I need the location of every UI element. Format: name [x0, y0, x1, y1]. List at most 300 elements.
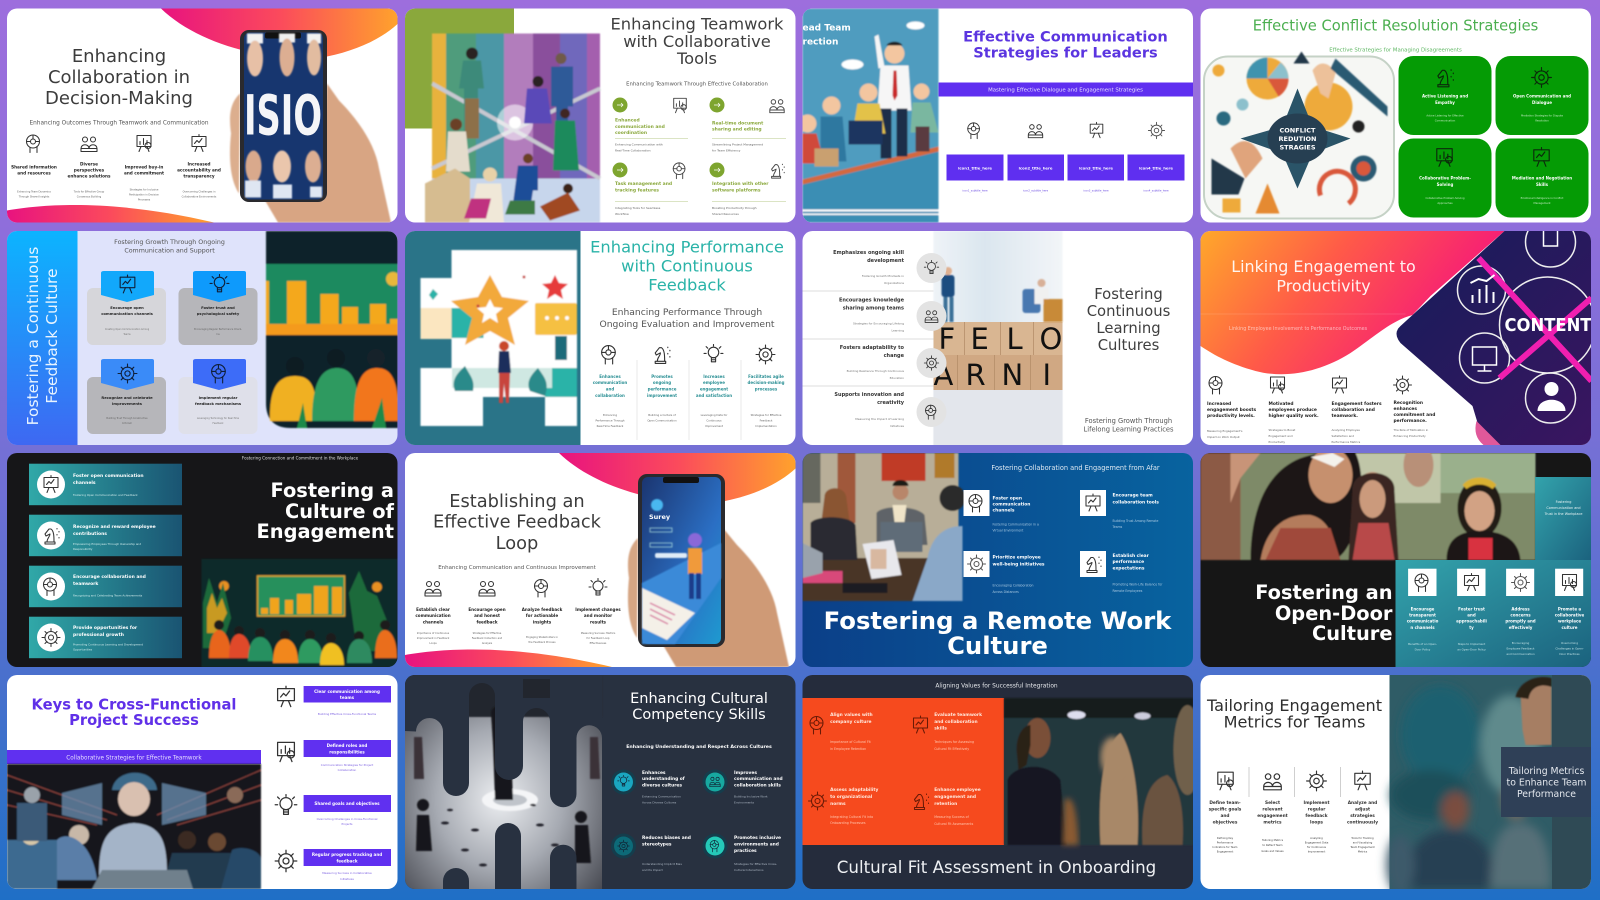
slate cutout bars	[405, 675, 602, 889]
item: select relevant metrics: engagement	[1257, 813, 1288, 819]
item: motivated employees: employees produce	[1268, 407, 1317, 413]
card: implement regular feedback	[178, 359, 258, 434]
item: implement regular feedback loops: feedback	[1305, 813, 1328, 819]
item: evaluate teamwork: Cultural Fit Effectively	[934, 747, 969, 751]
item: prioritize well-being	[964, 551, 1045, 594]
item: enhances communication: and	[606, 386, 614, 392]
illustration: conflict compass	[1204, 52, 1394, 218]
item: foster trust and approachability: Foster trust	[1458, 606, 1485, 612]
item: improves communication: Environments	[734, 800, 754, 804]
item: enhance employee engagement	[914, 787, 981, 826]
card: open communication: Resolution	[1535, 118, 1549, 122]
subtitle: Enhancing Understanding and Respect Across Cultures	[626, 744, 772, 750]
photo: man viewing sculptures	[1004, 698, 1202, 845]
item: increases employee engagement: engagement	[700, 386, 728, 392]
item: regular progress tracking: Measuring Success in Collaborative	[322, 871, 372, 875]
compass label: STRAGIES	[1279, 144, 1316, 152]
item: motivated employees: Engagement and	[1268, 434, 1293, 438]
item: recognition enhances commitment: The Role of Motivation in	[1392, 428, 1428, 432]
item: increases employee engagement: employee	[703, 380, 725, 385]
item: implement regular feedback loops: Analyzing	[1310, 836, 1323, 840]
item: implement changes: Effectiveness	[590, 641, 607, 645]
item: evaluate teamwork: skills	[934, 726, 947, 732]
item: prioritize well-being: Across Distances	[992, 590, 1019, 594]
item: encourage transparent communication: communicatio	[1407, 618, 1439, 624]
panel: Tailoring Engagement Metrics for Teams	[1200, 675, 1591, 895]
diagram word: CONTENT	[1504, 315, 1592, 336]
box caption: Communication and	[1546, 506, 1581, 510]
item: enhances understanding: Enhancing Communication	[642, 794, 681, 798]
item: define team-specific goals: Indicators for Team	[1213, 845, 1238, 849]
item: recognition enhances commitment	[1392, 376, 1435, 438]
panel: Effective Communication Strategies for Leaders	[798, 8, 1194, 222]
item: supports innovation: Supports innovation and	[834, 392, 904, 398]
item: select relevant metrics	[1257, 774, 1288, 853]
item: clear communication: teams	[340, 695, 355, 700]
item: icon 2: icon2_title_here	[1019, 166, 1053, 170]
item: foster open communication: communication	[992, 502, 1030, 508]
item: encourage transparent communication: n channels	[1410, 625, 1435, 630]
item: establish clear channels: Establish clear	[416, 607, 450, 612]
card: implement regular feedback: Leveraging Technology for Real-Time	[197, 417, 240, 420]
item: select relevant metrics: relevant	[1262, 806, 1283, 812]
item: icon 1	[946, 123, 1004, 192]
teal panel	[1396, 560, 1592, 667]
item: enhances understanding: Enhances	[642, 770, 666, 776]
title: Enhancing Cultural	[630, 691, 768, 707]
item: recognition enhances commitment: performance.	[1394, 418, 1427, 424]
item: facilitates agile decision-making: Implementation	[755, 424, 777, 428]
item: improves communication	[702, 770, 783, 804]
item: establish clear channels: Importance of Continuous	[417, 631, 450, 635]
item: icon 2: icon2_subtitle_here	[1023, 188, 1048, 192]
phone: survey app	[638, 474, 725, 647]
item: enhanced communication	[612, 98, 688, 152]
item: analyze and adjust strategies	[1347, 771, 1378, 854]
title: Loop	[496, 533, 538, 554]
blurred photo: business people	[1386, 675, 1552, 895]
panel: Effective Conflict Resolution Strategies	[1200, 8, 1591, 222]
card: recognize and celebrate: Building Trust Through Constructive	[106, 417, 148, 420]
item: engagement fosters collaboration: Analyzing Employee	[1332, 428, 1360, 432]
panel: Fostering an Open-Door Culture	[1200, 443, 1592, 667]
item: implement changes: and monitor	[584, 613, 612, 618]
item: promote collaborative workplace: Promote a	[1558, 606, 1581, 612]
item: enhances communication: communication	[593, 380, 627, 385]
phone word: ISIO	[244, 84, 322, 148]
purple band	[7, 750, 261, 764]
heading: Communication and Support	[124, 248, 215, 254]
card: encourage collaboration: Recognizing and Celebrating Team Achievements	[73, 594, 143, 598]
item: defined roles: Communication Strategies for Project	[321, 763, 374, 767]
card: recognize and celebrate: improvements	[112, 402, 143, 406]
compass label: CONFLICT	[1280, 126, 1316, 134]
item: address concerns: Address	[1511, 606, 1530, 612]
card: active listening: Active Listening and	[1422, 94, 1468, 98]
item: regular progress tracking: Regular progress tracking and	[312, 852, 382, 857]
bottom swoosh	[7, 205, 214, 222]
item: real-time document sharing: for Team Efficiency	[712, 148, 741, 152]
item: promotes ongoing performance: ongoing	[653, 380, 671, 385]
item: establish clear performance expectations: Remote Employees	[1112, 589, 1143, 593]
title: Establishing an	[449, 491, 585, 512]
item: engagement fosters collaboration: Satisfaction and	[1332, 434, 1354, 438]
item: diverse perspectives: Tools for Effective Group	[74, 190, 105, 194]
item: promotes ongoing performance	[647, 347, 677, 422]
item: promotes inclusive environments: Cultural Interactions	[734, 868, 764, 872]
item: engagement fosters collaboration	[1332, 376, 1382, 444]
item: engagement fosters collaboration: collaboration and	[1332, 407, 1375, 413]
item: foster open communication	[964, 490, 1039, 532]
item: enhances understanding	[611, 770, 685, 804]
item: encourages knowledge sharing: Encourages knowledge	[839, 298, 905, 304]
card: active listening: Empathy	[1435, 100, 1455, 105]
title: Project Success	[69, 712, 199, 729]
item: promotes ongoing performance: performance	[648, 386, 677, 392]
item: define team-specific goals: specific goals	[1209, 806, 1242, 812]
item: promotes ongoing performance: Promotes	[651, 374, 673, 379]
item: facilitates agile decision-making: processes	[755, 386, 778, 392]
illustration: star and team	[420, 250, 577, 426]
photo: family around table	[1200, 443, 1536, 560]
item: promotes ongoing performance: improvement	[647, 393, 677, 398]
item: enhanced communication: Enhancing Communication with	[615, 142, 663, 146]
item: increases employee engagement: Leveraging Data for	[701, 413, 728, 417]
item: implement regular feedback loops: Implement	[1303, 800, 1330, 806]
card: recognize and celebrate	[87, 359, 166, 434]
item: establish clear channels: channels	[423, 620, 444, 624]
item: select relevant metrics: Goals and Values	[1261, 849, 1284, 853]
item: assess adaptability	[808, 787, 878, 825]
subtitle: Enhancing Performance Through	[612, 307, 762, 318]
item: encourage team collaboration tools	[1080, 490, 1159, 529]
item: integration with other platforms	[710, 162, 786, 216]
purple band: Collaborative Strategies for Effective Teamwork	[66, 756, 202, 762]
item: enhanced communication: communication and	[615, 124, 665, 130]
purple band: Mastering Effective Dialogue and Engagement Strategies	[988, 88, 1143, 94]
title: Productivity	[1276, 276, 1371, 296]
item: analyze and adjust strategies: and Visualizing	[1353, 840, 1373, 844]
item: analyze and adjust strategies: strategies	[1350, 813, 1375, 819]
item: emphasizes ongoing skill development	[833, 250, 946, 285]
card: collaborative problem-solving	[1398, 138, 1492, 218]
item: promote collaborative workplace: collaborative	[1555, 612, 1585, 618]
title: Strategies for Leaders	[973, 44, 1158, 62]
item: foster trust and approachability: ty	[1469, 625, 1474, 630]
title: Metrics for Teams	[1224, 712, 1365, 732]
title: Fostering a Remote Work	[824, 606, 1172, 635]
item: analyze and adjust strategies: Analyze and	[1348, 800, 1377, 806]
card: provide opportunities: Promoting Continuous Learning and Development	[73, 642, 144, 646]
item: enhanced communication: Real-Time Collaboration	[615, 148, 651, 152]
item: establish clear channels: communication	[415, 613, 451, 618]
card: foster open communication: channels	[73, 480, 96, 486]
card: mediation and negotiation: Emotional Intelligence in Conflict	[1521, 196, 1563, 200]
item: improved buy-in: Processes	[138, 198, 151, 202]
item: implement regular feedback loops	[1303, 771, 1330, 854]
item: clear communication: Building Effective Cross-Functional Teams	[318, 712, 377, 716]
item: address concerns: and Communication	[1506, 652, 1535, 656]
item: engagement fosters collaboration: Performance Metrics	[1332, 440, 1361, 444]
item: define team-specific goals: Define team-	[1209, 800, 1241, 806]
panel: Fostering a Continuous Feedback Culture	[7, 231, 400, 445]
subtitle: Enhancing Outcomes Through Teamwork and Communication	[29, 120, 209, 126]
item: encourage team collaboration tools: Encourage team	[1112, 492, 1153, 498]
photo: wooden letter blocks	[934, 231, 1062, 445]
item: task management: Task management and	[615, 181, 672, 187]
item: regular progress tracking	[275, 849, 391, 881]
item: encourages knowledge sharing: Learning	[891, 328, 904, 332]
overlay caption box: Performance	[1517, 789, 1576, 800]
title: with Collaborative	[623, 32, 771, 51]
item: promotes inclusive environments: environments and	[734, 842, 779, 848]
item: address concerns: Encouraging	[1512, 641, 1529, 645]
item: foster trust and approachability: Steps to Implement	[1458, 642, 1486, 646]
item: shared information: Through Shared Insights	[19, 194, 50, 198]
title: Enhancing Teamwork	[611, 14, 784, 34]
photo: futuristic team	[7, 764, 261, 889]
item: reduces biases	[611, 834, 691, 872]
top subtitle: Fostering Connection and Commitment in the Workplace	[242, 456, 359, 460]
card: active listening	[1398, 56, 1492, 135]
item: prioritize well-being: Encouraging Collaboration	[992, 584, 1034, 588]
card: foster open communication: Fostering Open Communication and Feedback	[73, 493, 138, 497]
item: increased engagement: engagement boosts	[1207, 407, 1257, 413]
item: icon 4	[1128, 122, 1184, 192]
item: enhance employee engagement: retention	[934, 801, 957, 807]
blue side bar	[7, 231, 78, 445]
rotated title: Fostering a Continuous	[24, 247, 42, 425]
title: Tools	[676, 49, 717, 68]
panel: Cultural Fit Assessment in Onboarding	[802, 675, 1202, 889]
item: enhance employee engagement: Measuring Success of	[934, 815, 970, 819]
item: icon 4: icon4_subtitle_here	[1143, 188, 1169, 192]
survey label: Surey	[649, 513, 671, 521]
item: clear communication	[278, 686, 391, 716]
subtitle: Linking Employee Involvement to Performance Outcomes	[1229, 326, 1368, 332]
title: Engagement	[257, 520, 394, 543]
item: foster trust and approachability: and	[1467, 612, 1476, 618]
card: implement regular feedback: Feedback	[213, 422, 224, 425]
title: Culture	[947, 631, 1048, 660]
item: promote collaborative workplace	[1555, 569, 1585, 656]
item: clear communication: Clear communication among	[314, 689, 380, 694]
subtitle: Enhancing Communication and Continuous Improvement	[438, 565, 597, 571]
card: foster trust: psychological safety	[197, 312, 240, 316]
card: encourage collaboration	[29, 566, 182, 607]
item: establish clear channels	[415, 582, 451, 645]
item: analyze feedback	[522, 580, 563, 644]
item: foster trust and approachability: an Open-Door Policy	[1457, 648, 1486, 652]
item: implement changes: for Feedback Loop	[587, 636, 610, 640]
item: reduces biases: Reduces biases and	[642, 835, 691, 841]
item: select relevant metrics: to Reflect Team	[1262, 843, 1283, 847]
item: address concerns	[1505, 569, 1536, 656]
panel: Fostering Continuous Learning Cultures	[802, 231, 1193, 445]
photo: office meeting	[802, 453, 966, 601]
item: encourage open feedback: Feedback Collection and	[472, 636, 503, 640]
card: foster trust: Encouraging Regular Performance Check-	[194, 328, 242, 331]
item: foster open communication: Virtual Environment	[992, 528, 1024, 532]
item: promote collaborative workplace: Challenges in Open-	[1555, 646, 1584, 650]
card: open communication	[1496, 56, 1588, 135]
item: enhances communication: collaboration	[595, 393, 625, 398]
title: Collaboration in	[48, 67, 190, 88]
item: motivated employees: higher quality work.	[1268, 413, 1319, 419]
item: encourage open feedback	[468, 582, 506, 645]
item: encourage team collaboration tools: Teams	[1112, 525, 1123, 529]
item: assess adaptability: norms	[830, 801, 846, 807]
item: integration with other platforms: Shared Resources	[712, 212, 739, 216]
item: define team-specific goals: Engagement	[1217, 850, 1233, 854]
item: facilitates agile decision-making: Feedback	[760, 418, 773, 422]
item: shared goals: Projects	[341, 822, 353, 826]
overlay caption box: Tailoring Metrics	[1508, 766, 1584, 777]
title: Decision-Making	[45, 88, 193, 109]
orange panel	[802, 698, 1004, 845]
panel: Establishing an Effective Feedback Loop	[405, 453, 796, 667]
item: shared information: Enhancing Team Dynamics	[17, 190, 52, 194]
item: motivated employees: Motivated	[1268, 401, 1294, 407]
card: provide opportunities: Provide opportunities for	[73, 625, 138, 631]
title: Feedback	[648, 276, 726, 294]
item: select relevant metrics: Select	[1265, 800, 1280, 806]
card: mediation and negotiation	[1496, 138, 1588, 218]
item: recognition enhances commitment: enhances	[1394, 406, 1417, 412]
item: increases employee engagement: Continuous	[706, 418, 722, 422]
item: align values	[810, 712, 873, 751]
item: enhance employee engagement: engagement and	[934, 794, 976, 800]
item: improved buy-in: Improved buy-in	[125, 164, 163, 170]
item: analyze and adjust strategies: Team Engagement	[1350, 845, 1375, 849]
item: encourage open feedback: and honest	[474, 613, 500, 618]
item: fosters adaptability: Fosters adaptability to	[840, 345, 905, 351]
item: analyze and adjust strategies: adjust	[1355, 806, 1370, 812]
item: establish clear performance expectations: Promoting Work-Life Balance for	[1112, 582, 1163, 586]
item: reduces biases: and Its Impact	[642, 868, 664, 872]
illustration: team and chart in jungle	[202, 559, 398, 667]
card: recognize and reward	[29, 515, 182, 556]
item: real-time document sharing	[710, 98, 786, 152]
item: establish clear performance expectations: expectations	[1112, 566, 1145, 572]
item: address concerns: promptly and	[1505, 618, 1536, 624]
item: emphasizes ongoing skill development: Organizations	[884, 281, 904, 285]
item: engagement fosters collaboration: Engagement fosters	[1332, 401, 1382, 407]
item: supports innovation	[834, 392, 946, 428]
item: implement changes: Measuring Success: Metrics	[581, 631, 616, 635]
title: Fostering an	[1255, 581, 1392, 604]
item: improves communication: Improves	[734, 770, 757, 776]
item: enhances understanding: Across Diverse Cultures	[642, 800, 677, 804]
item: establish clear channels: Improvement in Feedback	[417, 636, 450, 640]
item: increased accountability: accountability and	[177, 168, 221, 172]
item: encourages knowledge sharing: sharing among teams	[843, 306, 904, 312]
item: foster trust and approachability	[1456, 569, 1487, 652]
card: foster trust: Foster trust and	[201, 306, 235, 310]
item: engagement fosters collaboration: teamwork.	[1332, 413, 1358, 419]
item: reduces biases: Understanding Implicit Bias	[642, 862, 682, 866]
item: align values: company culture	[830, 719, 872, 725]
item: promote collaborative workplace: culture	[1561, 625, 1578, 630]
item: integration with other platforms: Boosting Productivity through	[712, 206, 757, 210]
item: fosters adaptability	[840, 345, 946, 380]
item: align values: Importance of Cultural Fit	[830, 740, 872, 744]
title: Culture of	[285, 500, 395, 523]
item: task management: tracking features	[615, 188, 659, 194]
item: emphasizes ongoing skill development: development	[867, 258, 905, 264]
card: encourage collaboration: Encourage collaboration and	[73, 574, 146, 580]
item: foster open communication: channels	[992, 508, 1015, 514]
item: enhances communication: Real-Time Feedback	[597, 424, 624, 428]
item: defined roles	[278, 740, 391, 772]
card: implement regular feedback: feedback mechanisms	[195, 402, 242, 406]
item: enhanced communication: coordination	[615, 130, 647, 136]
item: improved buy-in	[124, 136, 164, 202]
item: promotes ongoing performance: Open Communication	[647, 418, 677, 422]
card: recognize and reward: Responsibility	[73, 547, 93, 551]
item: enhance employee engagement: Cultural Fit Assessments	[934, 822, 974, 826]
item: increases employee engagement: Improvement	[705, 424, 723, 428]
panel: Keys to Cross-Functional Project Success	[7, 675, 398, 889]
panel: Fostering a Remote Work Culture	[802, 453, 1193, 667]
item: implement regular feedback loops: Improvement	[1308, 850, 1325, 854]
item: implement changes	[575, 578, 621, 645]
item: evaluate teamwork: Evaluate teamwork	[934, 712, 982, 718]
block letters: FELO	[938, 322, 1062, 356]
item: motivated employees: Productivity	[1268, 440, 1285, 444]
item: improves communication: communication and	[734, 776, 783, 782]
item: icon 3	[1068, 122, 1124, 192]
title: Continuous	[1087, 303, 1170, 320]
item: assess adaptability: Onboarding Processes	[830, 821, 866, 825]
item: shared goals: Shared goals and objectives	[314, 801, 380, 806]
item: foster open communication: Foster open	[992, 496, 1022, 502]
item: implement regular feedback loops: Engagement Data	[1305, 840, 1329, 844]
title: Enhancing Performance	[590, 238, 784, 256]
item: recognition enhances commitment: Enhancing Productivity	[1394, 434, 1426, 438]
item: select relevant metrics: metrics	[1263, 820, 1282, 826]
item: increased engagement	[1207, 376, 1257, 439]
item: shared goals: Overcoming Challenges in Cross-Functional	[317, 817, 378, 821]
title: Effective Communication	[963, 28, 1168, 46]
top swoosh	[559, 453, 796, 502]
card: recognize and reward: contributions	[73, 531, 107, 537]
item: promotes ongoing performance: Building a Culture of	[648, 413, 676, 417]
item: implement regular feedback loops: regular	[1308, 806, 1326, 812]
item: implement regular feedback loops: loops	[1310, 820, 1323, 826]
item: enhances understanding: understanding of	[642, 776, 685, 782]
title: Enhancing	[72, 46, 166, 67]
card: mediation and negotiation: Mediation and Negotiation	[1512, 176, 1572, 180]
item: implement regular feedback loops: for Continuous	[1307, 845, 1327, 849]
card: collaborative problem-solving: Collaborative Problem-Solving	[1425, 196, 1465, 200]
item: facilitates agile decision-making: decision-making	[748, 380, 785, 385]
item: motivated employees: Strategies to Boost	[1268, 428, 1296, 432]
image caption: ead Team	[802, 24, 851, 34]
item: establish clear performance expectations: performance	[1112, 559, 1144, 565]
title: Keys to Cross-Functional	[32, 696, 236, 714]
item: define team-specific goals: Performance	[1217, 840, 1234, 844]
title: Open-Door	[1275, 602, 1393, 625]
item: assess adaptability: Assess adaptability	[830, 787, 878, 793]
block letters second row: ARNI	[934, 358, 1051, 392]
item: supports innovation: Initiatives	[890, 424, 904, 428]
item: supports innovation: creativity	[877, 400, 905, 406]
item: defined roles: responsibilities	[329, 750, 365, 754]
item: align values: Align values with	[830, 712, 873, 718]
title: Effective Feedback	[433, 512, 602, 532]
item: assess adaptability: to organizational	[830, 794, 873, 800]
